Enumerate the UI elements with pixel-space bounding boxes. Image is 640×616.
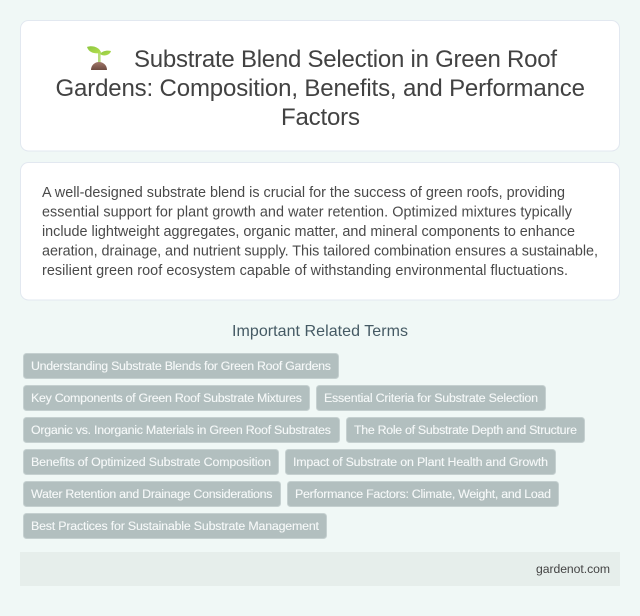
title: Substrate Blend Selection in Green Roof <box>134 46 557 73</box>
tag: organic vs inorganic: Organic vs. Inorganic Materials in Green Roof Substrates <box>31 423 331 437</box>
title: Gardens: Composition, Benefits, and Performance <box>56 75 585 102</box>
panel: intro description <box>20 162 620 300</box>
text block: intro paragraph: aeration, drainage, and nutrient supply. This tailored combination ensures a sustainable, <box>42 244 598 260</box>
panel: title header <box>20 20 620 151</box>
tag: benefits of optimized composition <box>24 450 278 474</box>
tag: essential criteria <box>316 386 546 410</box>
text block: intro paragraph: essential support for plant growth and water retention. Optimized mixtures typically <box>42 204 573 220</box>
tag list: related terms <box>24 354 584 538</box>
footer: site name: gardenot.com <box>536 562 610 576</box>
tag: key components: Key Components of Green Roof Substrate Mixtures <box>31 391 302 405</box>
text block: intro paragraph: A well-designed substrate blend is crucial for the success of green roofs, providing <box>42 185 565 201</box>
tag: essential criteria: Essential Criteria for Substrate Selection <box>324 391 538 405</box>
tag: organic vs inorganic <box>24 418 340 442</box>
footer <box>20 552 620 586</box>
title <box>56 46 585 131</box>
icon: seedling <box>87 46 111 70</box>
tag: impact on plant health <box>286 450 556 474</box>
tag: performance factors: Performance Factors: Climate, Weight, and Load <box>295 487 551 501</box>
text block: intro paragraph: resilient green roof ecosystem capable of withstanding environmental fluctuations. <box>42 263 568 279</box>
tag: best practices <box>24 514 326 538</box>
tag: understanding substrate blends: Understanding Substrate Blends for Green Roof Gardens <box>31 359 331 373</box>
tag: key components <box>24 386 310 410</box>
tag: substrate depth <box>346 418 584 442</box>
tag: water retention: Water Retention and Drainage Considerations <box>31 487 272 501</box>
title: Factors <box>281 104 360 131</box>
text block: intro paragraph: include lightweight aggregates, organic matter, and mineral components to enhance <box>42 224 575 240</box>
heading: important related terms: Important Related Terms <box>232 323 408 340</box>
tag: understanding substrate blends <box>24 354 338 378</box>
tag: performance factors <box>288 482 558 506</box>
tag: best practices: Best Practices for Sustainable Substrate Management <box>31 519 320 533</box>
tag: substrate depth: The Role of Substrate Depth and Structure <box>354 423 577 437</box>
tag: benefits of optimized composition: Benefits of Optimized Substrate Composition <box>31 455 271 469</box>
tag: impact on plant health: Impact of Substrate on Plant Health and Growth <box>293 455 548 469</box>
text block: intro paragraph <box>42 185 598 279</box>
tag: water retention <box>24 482 280 506</box>
